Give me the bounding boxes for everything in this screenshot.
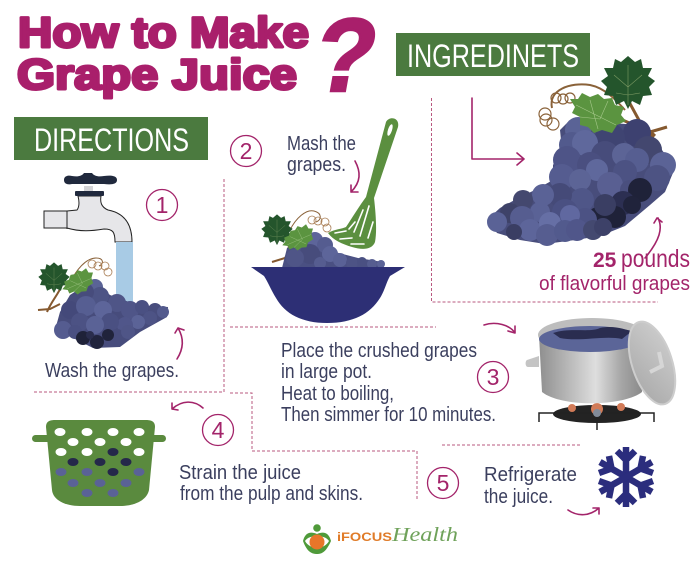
heading: ingredients: INGREDINETS (407, 38, 579, 74)
step 3 text (281, 340, 496, 426)
step 2 text (287, 133, 356, 176)
step 4 text (179, 462, 363, 505)
arrow: to grapes (472, 98, 524, 165)
step 5 text (484, 464, 577, 508)
dark leaf (601, 56, 655, 109)
step 3 text: Then simmer for 10 minutes. (281, 404, 496, 426)
step 5 text: the juice. (484, 486, 553, 508)
title: How to Make (18, 9, 309, 57)
arrow: pot (484, 323, 515, 333)
vine and tendrils (539, 84, 667, 143)
icon: snowflake (599, 447, 653, 507)
step 4 number: 4 (212, 417, 225, 443)
title: Grape Juice (17, 51, 297, 99)
ingredient amount (539, 245, 690, 295)
logo text: iFOCUS (337, 530, 392, 544)
icon: bowl (251, 267, 405, 323)
icon: pot on burner (526, 316, 684, 430)
question mark: ? (306, 0, 386, 114)
heading: directions (14, 117, 208, 160)
icon: strainer basket (32, 420, 166, 506)
step 5 number: 5 (437, 470, 449, 496)
step 3 number (478, 362, 508, 392)
step 1 number (146, 190, 178, 220)
arrow: snowflake (568, 508, 599, 515)
step 1 text: Wash the grapes. (45, 360, 179, 382)
arrow: to large grapes (645, 218, 662, 258)
icon: faucet (44, 173, 132, 242)
step 4 text: from the pulp and skins. (180, 483, 363, 505)
large grape cluster illustration (487, 56, 676, 246)
step 5 number (428, 468, 458, 498)
step 3 text: Place the crushed grapes (281, 340, 477, 362)
arrow: wash (175, 328, 184, 359)
wash grape cluster (38, 258, 169, 349)
step 3 number: 3 (487, 364, 499, 390)
grapes (487, 120, 675, 244)
step 3 text: in large pot. (281, 361, 372, 383)
step 2 number: 2 (240, 138, 252, 164)
step 2 number (230, 136, 262, 166)
step 4 text: Strain the juice (179, 462, 301, 484)
logo: iFocusHealth (303, 524, 458, 554)
water stream (116, 242, 133, 304)
light leaf (570, 93, 626, 133)
mash grape cluster (261, 211, 385, 269)
step 5 text: Refrigerate (484, 464, 577, 486)
step 3 text: Heat to boiling, (281, 383, 394, 405)
logo icon (303, 524, 331, 554)
ingredient amount: 25 (593, 249, 617, 272)
step 1 number: 1 (156, 192, 168, 218)
step 4 number (202, 414, 234, 446)
ingredient amount: of flavorful grapes (539, 273, 690, 295)
logo: iFocusHealth: Health (391, 524, 458, 546)
step 2 text: Mash the (287, 133, 356, 155)
heading: ingredients (396, 33, 590, 76)
arrow: basket (172, 402, 203, 410)
step 2 text: grapes. (287, 154, 346, 176)
arrow: mash (351, 161, 359, 192)
heading: directions: DIRECTIONS (34, 122, 189, 158)
title (17, 9, 309, 99)
icon: masher (328, 118, 398, 249)
